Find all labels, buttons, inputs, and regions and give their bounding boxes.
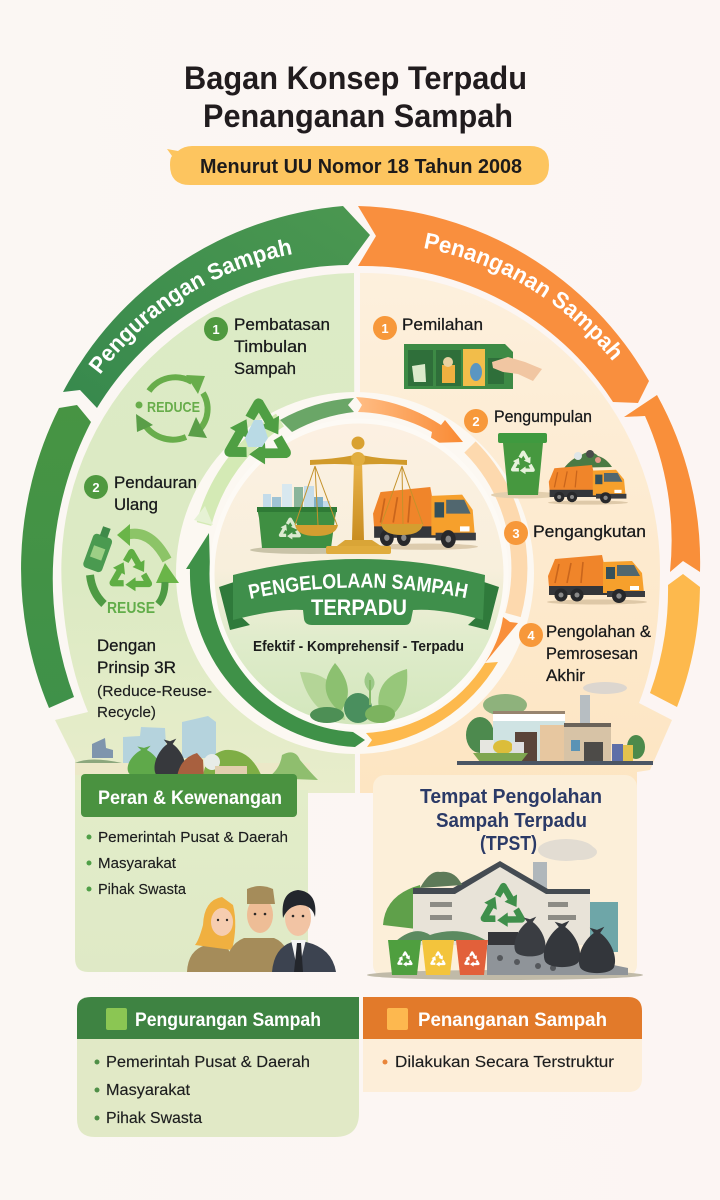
label: pengurangan curved: Pengurangan Sampah xyxy=(88,240,292,374)
item 4: pengolahan pemrosesan akhir xyxy=(519,623,651,685)
item 1: pembatasan timbulan sampah: Pembatasan xyxy=(234,316,330,334)
item 2: pendauran ulang: Ulang xyxy=(114,496,158,514)
item 4: pengolahan pemrosesan akhir: 4 xyxy=(527,628,535,643)
legend: pengurangan sampah: Pihak Swasta xyxy=(106,1110,202,1127)
item 3: pengangkutan: 3 xyxy=(512,526,520,541)
legend: penanganan sampah: Dilakukan Secara Terstruktur xyxy=(395,1054,615,1071)
subtitle pill xyxy=(167,146,549,185)
text: prinsip 3R xyxy=(97,637,212,721)
label: penanganan curved: Penanganan Sampah xyxy=(424,232,620,360)
text: prinsip 3R: Dengan xyxy=(97,637,156,655)
heading: TPST: Tempat Pengolahan xyxy=(420,786,602,808)
outer arrow: right orange xyxy=(624,395,700,572)
legend: pengurangan sampah: Masyarakat xyxy=(106,1082,191,1099)
illustration: TPST plant xyxy=(367,839,643,980)
legend: penanganan sampah xyxy=(363,997,642,1092)
icon: green bin with bottles xyxy=(250,484,370,554)
panel: right light peach background xyxy=(360,273,672,793)
icon: green bin xyxy=(491,433,559,498)
text: prinsip 3R: Prinsip 3R xyxy=(97,659,176,677)
panel: TPST xyxy=(367,775,643,980)
item 1: pembatasan timbulan sampah: 1 xyxy=(212,322,220,337)
panel: left light green background xyxy=(55,273,355,793)
icon: reuse xyxy=(82,524,179,617)
title: Bagan Konsep Terpadu xyxy=(184,60,527,96)
icon: collection truck xyxy=(548,450,628,505)
heading: TPST xyxy=(420,786,602,855)
item 2: pendauran ulang xyxy=(84,474,197,514)
icon: reuse: REUSE xyxy=(107,600,155,617)
item 3: pengangkutan xyxy=(504,521,646,545)
banner: pengelolaan sampah terpadu xyxy=(219,559,499,630)
title: Penanganan Sampah xyxy=(203,98,513,134)
panel: peran dan kewenangan: Pihak Swasta xyxy=(98,881,187,898)
text: prinsip 3R: (Reduce-Reuse- xyxy=(97,683,212,700)
icon: orange truck xyxy=(372,487,478,550)
panel: peran dan kewenangan: Peran & Kewenangan xyxy=(98,788,282,809)
banner: pengelolaan sampah terpadu: TERPADU xyxy=(311,595,407,620)
item 2: pengumpulan: 2 xyxy=(472,414,480,429)
banner: pengelolaan sampah terpadu: PENGELOLAAN SAMPAH xyxy=(248,574,468,599)
panel: peran dan kewenangan: Pemerintah Pusat & Daerah xyxy=(98,829,288,846)
text: efektif komprehensif terpadu: Efektif - Komprehensif - Terpadu xyxy=(253,638,464,655)
outer arrow: pengurangan top xyxy=(63,206,370,408)
illustration: processing facility xyxy=(457,682,653,765)
illustration: three people xyxy=(187,886,336,972)
icon: leaves xyxy=(300,663,407,723)
legend: pengurangan sampah xyxy=(77,997,359,1137)
illustration: city and rubbish xyxy=(75,716,318,780)
icon: sorting box with hand xyxy=(404,344,542,389)
item 3: pengangkutan: Pengangkutan xyxy=(533,523,646,541)
item 1: pemilahan xyxy=(373,316,483,340)
inner ring xyxy=(176,392,534,754)
item 2: pengumpulan: Pengumpulan xyxy=(494,408,592,426)
outer arrow: right yellow xyxy=(650,574,700,707)
legend: pengurangan sampah: Pengurangan Sampah xyxy=(135,1010,321,1031)
icon: transport truck xyxy=(547,555,647,604)
icon: reduce xyxy=(136,375,208,440)
item 4: pengolahan pemrosesan akhir: Akhir xyxy=(546,667,586,685)
item 1: pembatasan timbulan sampah: Sampah xyxy=(234,360,296,378)
item 1: pemilahan: Pemilahan xyxy=(402,316,483,334)
outer arrow: left green xyxy=(21,405,91,708)
title xyxy=(184,60,527,134)
text: prinsip 3R: Recycle) xyxy=(97,704,156,721)
icon: balance scale xyxy=(295,436,423,554)
heading: TPST: (TPST) xyxy=(480,833,537,855)
item 1: pemilahan: 1 xyxy=(381,321,389,336)
panel: peran dan kewenangan: Masyarakat xyxy=(98,855,177,872)
subtitle pill: Menurut UU Nomor 18 Tahun 2008 xyxy=(200,156,522,178)
item 4: pengolahan pemrosesan akhir: Pemrosesan xyxy=(546,645,638,663)
item 2: pendauran ulang: Pendauran xyxy=(114,474,197,492)
centre disc xyxy=(212,421,506,727)
legend: penanganan sampah: Penanganan Sampah xyxy=(418,1010,607,1031)
heading: TPST: Sampah Terpadu xyxy=(436,810,587,832)
legend: pengurangan sampah: Pemerintah Pusat & Daerah xyxy=(106,1054,310,1071)
panel: peran dan kewenangan xyxy=(75,774,308,972)
item 4: pengolahan pemrosesan akhir: Pengolahan & xyxy=(546,623,651,641)
item 2: pengumpulan xyxy=(464,408,592,433)
icon: reduce: REDUCE xyxy=(147,399,200,416)
icon: recycling arrows with bottle xyxy=(215,398,297,473)
outer arrow: penanganan top xyxy=(358,206,649,403)
item 1: pembatasan timbulan sampah xyxy=(204,316,330,378)
item 2: pendauran ulang: 2 xyxy=(92,480,100,495)
item 1: pembatasan timbulan sampah: Timbulan xyxy=(234,338,307,356)
